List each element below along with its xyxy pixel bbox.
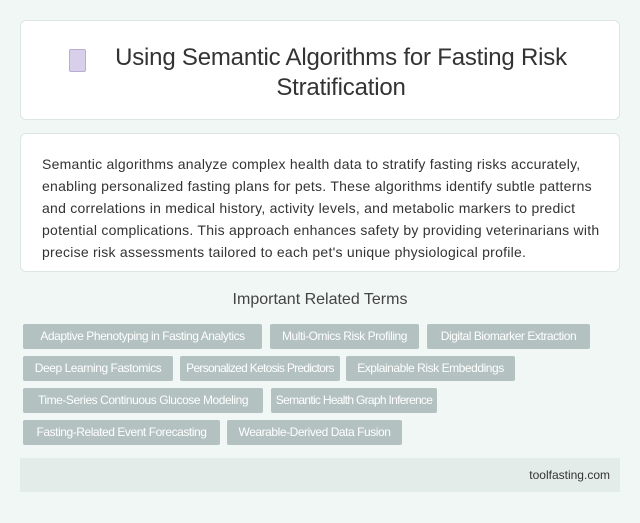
tags: Adaptive Phenotyping in Fasting Analytics [40,329,245,343]
heading: related terms: Important Related Terms [233,291,407,308]
tags: Semantic Health Graph Inference [276,393,432,407]
description panel [20,133,620,272]
footer text: toolfasting.com [529,468,610,482]
tags: Deep Learning Fastomics [35,361,161,375]
tags: Digital Biomarker Extraction [441,329,576,343]
header panel [20,20,620,120]
icon: document [69,49,86,72]
tags: Wearable-Derived Data Fusion [239,425,390,439]
description text: Semantic algorithms analyze complex health data to stratify fasting risks accurately, enabling personalized fasting plans for pets. These algorithms identify subtle patterns and correlations in medical history, activity levels, and metabolic markers to predict potential complications. This approach enhances safety by providing veterinarians with precise risk assessments tailored to each pet's unique physiological profile. [42,156,599,260]
footer [20,458,620,492]
tags: Explainable Risk Embeddings [357,361,504,375]
tags: Fasting-Related Event Forecasting [37,425,206,439]
tags: Time-Series Continuous Glucose Modeling [38,393,248,407]
title: Using Semantic Algorithms for Fasting Risk Stratification [115,44,567,101]
tags: Personalized Ketosis Predictors [186,361,334,375]
tags: Multi-Omics Risk Profiling [282,329,407,343]
